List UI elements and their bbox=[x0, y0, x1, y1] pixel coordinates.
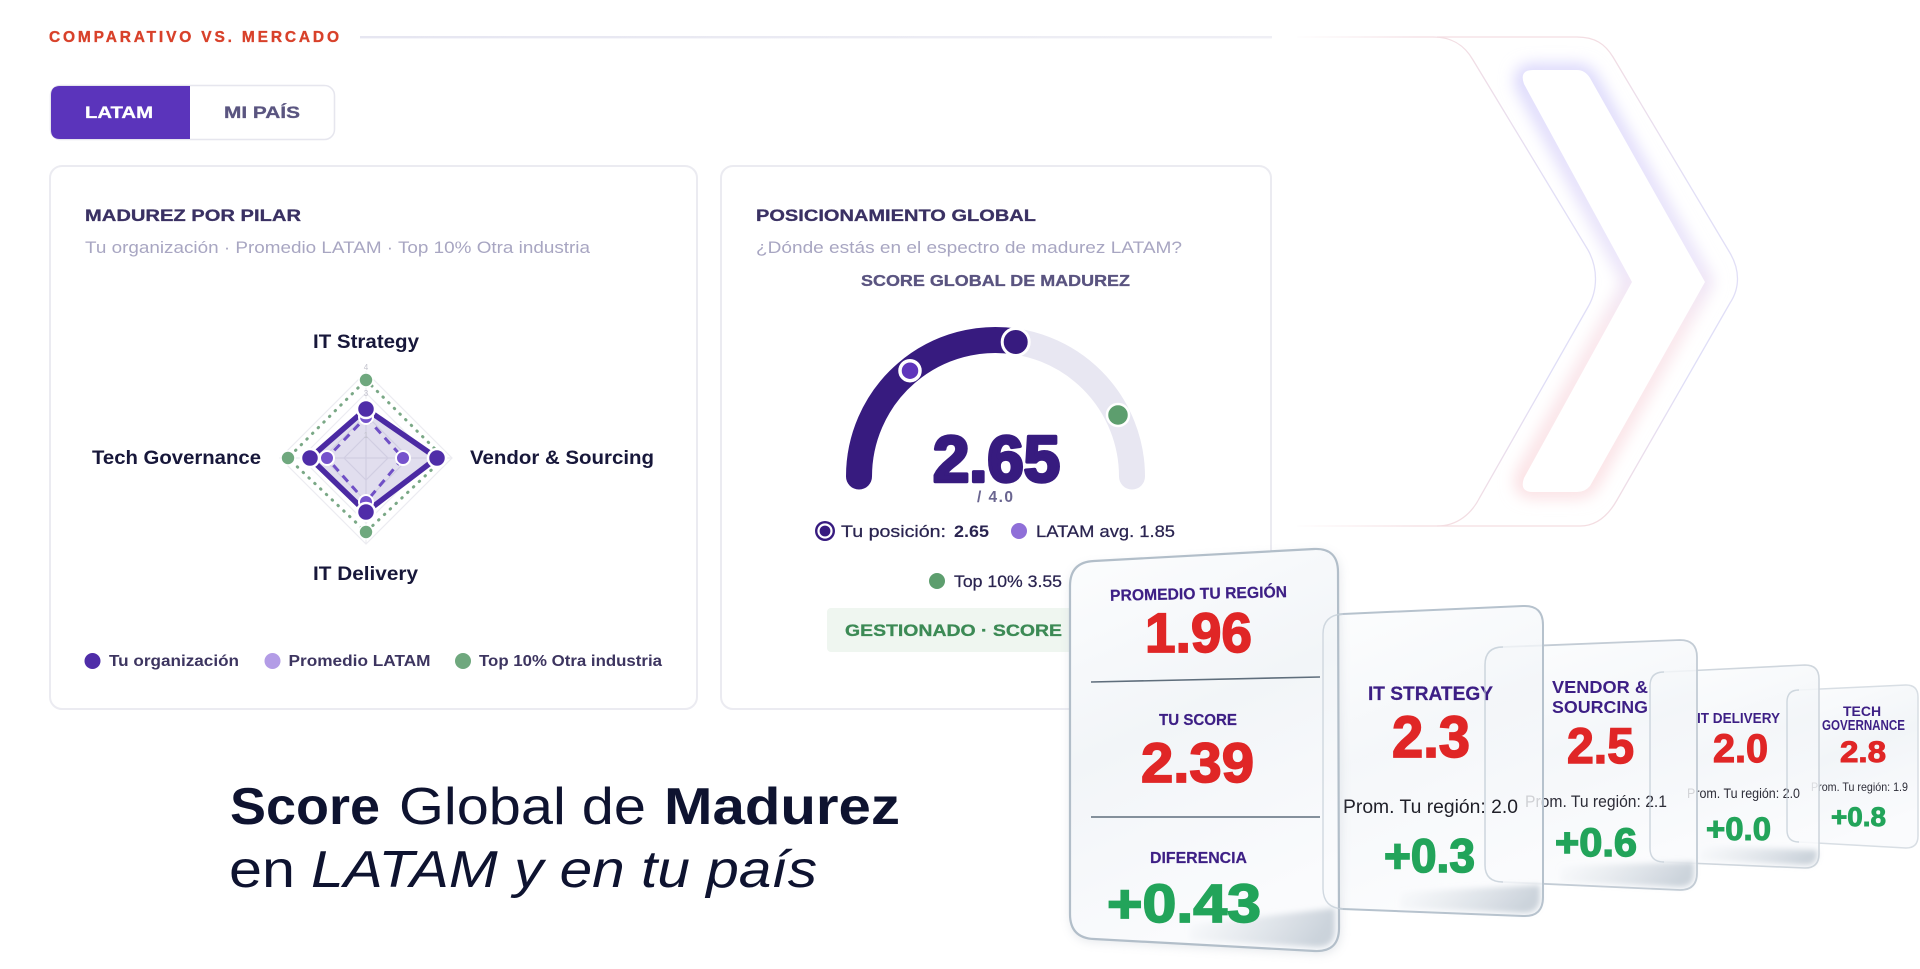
gauge legend: Top 10% 3.55 bbox=[954, 572, 1062, 591]
radar axis labels: IT Strategy bbox=[313, 332, 419, 353]
main title: Global de bbox=[399, 778, 646, 836]
radar chart: 1 bbox=[364, 431, 369, 440]
gauge chart bbox=[859, 328, 1132, 506]
radar chart: 4 bbox=[364, 363, 369, 372]
glass card: tech governance: 2.8 bbox=[1840, 736, 1886, 769]
main title bbox=[229, 778, 900, 899]
main title: en bbox=[229, 841, 295, 899]
gauge legend: Tu posición: bbox=[841, 522, 946, 541]
radar legend: Tu organización bbox=[109, 653, 239, 670]
glass card: it strategy: 2.3 bbox=[1392, 705, 1470, 770]
status badge bbox=[827, 608, 1167, 652]
glass card: it strategy bbox=[1323, 606, 1543, 916]
gauge value: 2.65 bbox=[933, 422, 1060, 496]
glass card: vendor and sourcing: 2.5 bbox=[1567, 718, 1634, 774]
tab switch: LATAM bbox=[85, 103, 153, 122]
main title: LATAM y en tu país bbox=[311, 841, 817, 899]
section header: COMPARATIVO VS. MERCADO bbox=[49, 29, 339, 46]
tab switch: MI PAÍS bbox=[224, 103, 300, 122]
glass card: tech governance: +0.8 bbox=[1831, 802, 1886, 832]
glass card edges seen through overlapping cards bbox=[1323, 614, 1799, 909]
glass card: vendor and sourcing bbox=[1485, 640, 1697, 890]
glass card: it strategy: +0.3 bbox=[1384, 829, 1475, 882]
panel: madurez por pilar bbox=[50, 166, 697, 709]
glass card: resumen: DIFERENCIA bbox=[1150, 850, 1247, 867]
tab switch bbox=[50, 86, 334, 140]
radar legend: Top 10% Otra industria bbox=[479, 653, 662, 670]
subtitle: posicionamiento global: ¿Dónde estás en el espectro de madurez LATAM? bbox=[756, 238, 1182, 257]
glass card: it strategy: Prom. Tu región: 2.0 bbox=[1343, 797, 1518, 818]
glass card: resumen: 2.39 bbox=[1141, 731, 1254, 794]
glass card: vendor and sourcing: Prom. Tu región: 2.1 bbox=[1525, 793, 1667, 811]
glass card: resumen bbox=[1070, 549, 1341, 954]
glass card: tech governance bbox=[1787, 685, 1918, 848]
glass card: resumen: PROMEDIO TU REGIÓN bbox=[1110, 582, 1287, 605]
radar axis labels: IT Delivery bbox=[313, 564, 418, 585]
radar legend bbox=[84, 653, 662, 670]
glass card: tech governance: Prom. Tu región: 1.9 bbox=[1811, 780, 1908, 794]
glass card: vendor and sourcing: VENDOR & bbox=[1552, 677, 1648, 697]
glass card: it strategy: IT STRATEGY bbox=[1368, 684, 1493, 705]
heading: madurez por pilar: MADUREZ POR PILAR bbox=[85, 206, 301, 225]
main title: Madurez bbox=[664, 778, 900, 836]
glass card: it delivery: +0.0 bbox=[1706, 811, 1771, 847]
gauge heading: SCORE GLOBAL DE MADUREZ bbox=[861, 273, 1131, 290]
glass card: it delivery: 2.0 bbox=[1713, 727, 1768, 771]
glass card: vendor and sourcing: +0.6 bbox=[1555, 821, 1637, 865]
glass card: it delivery: IT DELIVERY bbox=[1697, 711, 1780, 727]
decorative chevron outline bbox=[1290, 30, 1738, 532]
gauge legend: 2.65 bbox=[954, 522, 989, 541]
gauge legend: LATAM avg. 1.85 bbox=[1036, 522, 1175, 541]
glass card: resumen: +0.43 bbox=[1107, 874, 1261, 934]
heading: posicionamiento global: POSICIONAMIENTO GLOBAL bbox=[756, 206, 1036, 225]
radar chart: 3 bbox=[364, 389, 369, 398]
radar axis labels: Tech Governance bbox=[92, 448, 261, 469]
subtitle: madurez por pilar: Tu organización · Promedio LATAM · Top 10% Otra industria bbox=[85, 238, 591, 257]
glass card: it delivery bbox=[1650, 665, 1819, 868]
main title: Score bbox=[230, 778, 380, 836]
glass card: vendor and sourcing: SOURCING bbox=[1552, 697, 1648, 717]
glass card: tech governance: TECH bbox=[1843, 703, 1881, 719]
status badge: GESTIONADO · SCORE bbox=[845, 621, 1062, 640]
panel: posicionamiento global bbox=[721, 166, 1271, 709]
radar axis labels bbox=[92, 332, 654, 585]
radar chart bbox=[280, 363, 452, 544]
radar axis labels: Vendor & Sourcing bbox=[470, 448, 654, 469]
glass card: resumen: TU SCORE bbox=[1159, 712, 1237, 729]
glass card: it delivery: Prom. Tu región: 2.0 bbox=[1687, 785, 1800, 801]
gauge scale: / 4.0 bbox=[977, 489, 1013, 506]
radar legend: Promedio LATAM bbox=[288, 653, 430, 670]
gauge legend bbox=[815, 521, 1175, 591]
glass card: resumen: 1.96 bbox=[1145, 601, 1252, 664]
